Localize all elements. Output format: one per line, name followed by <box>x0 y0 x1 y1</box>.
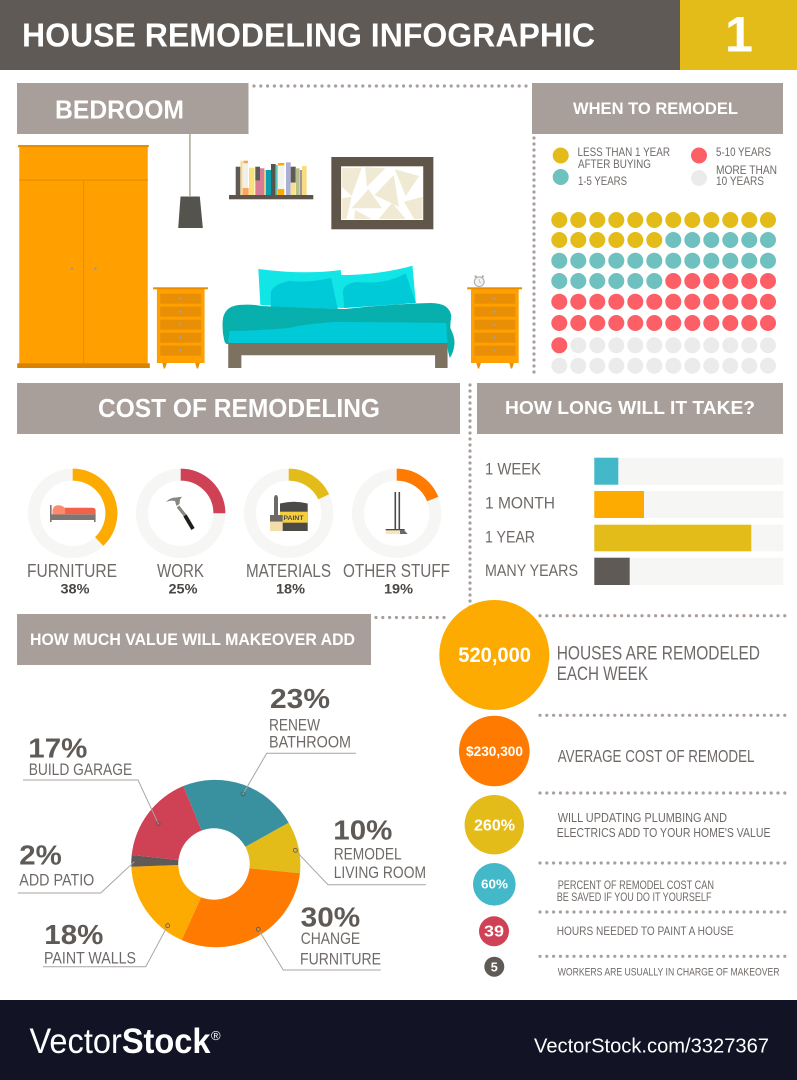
stat: 60% saved <box>473 863 714 906</box>
title: HOUSE REMODELING INFOGRAPHIC <box>22 16 595 54</box>
panel: bedroom <box>17 83 522 368</box>
framed picture <box>331 157 433 229</box>
heading: how much value <box>17 614 371 665</box>
panel: when to remodel <box>532 83 783 374</box>
stat: average cost <box>459 716 755 786</box>
stat: 5 workers: 5 <box>491 960 498 974</box>
footer url: VectorStock.com/3327367 <box>534 1036 769 1058</box>
gauge: work <box>142 475 219 597</box>
callout: change furniture: FURNITURE <box>300 950 381 968</box>
stat: 260% value: WILL UPDATING PLUMBING AND <box>558 811 727 825</box>
heading: cost of remodeling: COST OF REMODELING <box>98 393 380 423</box>
bookshelf <box>229 161 313 199</box>
label: furniture: FURNITURE <box>27 561 117 581</box>
panel: cost of remodeling <box>17 383 460 597</box>
callout: remodel living room: 10% <box>333 814 392 845</box>
legend: LESS THAN 1 YEAR <box>578 145 670 159</box>
value: 18%: 18% <box>276 581 306 597</box>
bar: 1 month: 1 MONTH <box>485 494 555 513</box>
callout: add patio <box>18 839 136 893</box>
heading: bedroom: BEDROOM <box>55 94 184 124</box>
bar: many years <box>485 558 783 585</box>
furniture group <box>17 134 522 368</box>
legend <box>553 145 777 188</box>
stat: 39 hours: 39 <box>484 924 504 940</box>
value: 25%: 25% <box>168 581 198 597</box>
stat: 60% saved: BE SAVED IF YOU DO IT YOURSELF <box>557 892 712 904</box>
label: other stuff: OTHER STUFF <box>343 561 450 581</box>
callout: change furniture <box>256 902 381 970</box>
wardrobe <box>17 145 150 368</box>
bar: 1 year: 1 YEAR <box>485 527 535 546</box>
icon: hammer <box>166 497 193 529</box>
mattress <box>229 320 447 343</box>
donut chart <box>131 780 300 947</box>
page number: 1 <box>725 6 753 62</box>
bed <box>223 266 455 368</box>
dot matrix chart <box>551 212 776 374</box>
callout: remodel living room: LIVING ROOM <box>334 864 426 882</box>
panel: how long will it take <box>477 383 783 585</box>
stat: 39 hours <box>479 916 734 946</box>
callout: remodel living room <box>293 814 426 885</box>
heading: when to remodel <box>532 83 783 134</box>
alarm clock <box>474 275 484 287</box>
value: 38%: 38% <box>60 581 90 597</box>
callout: add patio: 2% <box>19 839 62 870</box>
legend: 10 YEARS <box>716 174 764 188</box>
gauge: other stuff <box>343 475 450 597</box>
stat: average cost: $230,300 <box>466 744 523 759</box>
bar: 1 week <box>485 458 783 485</box>
callout: add patio: ADD PATIO <box>19 872 94 890</box>
callout: build garage: 17% <box>28 732 87 763</box>
legend: AFTER BUYING <box>578 157 651 171</box>
stat: 60% saved: 60% <box>481 877 508 892</box>
stat: 60% saved: PERCENT OF REMODEL COST CAN <box>558 880 714 892</box>
callout: renew bathroom: RENEW <box>269 716 320 734</box>
stat: 520,000 houses: 520,000 <box>458 644 531 667</box>
heading: how long <box>477 383 783 434</box>
bar: 1 week: 1 WEEK <box>485 460 542 479</box>
stat: 39 hours: HOURS NEEDED TO PAINT A HOUSE <box>557 924 734 938</box>
stat: 520,000 houses <box>439 600 760 710</box>
label: materials: MATERIALS <box>246 561 331 581</box>
legend: 1-5 YEARS <box>578 174 627 188</box>
panel: key statistics <box>439 600 780 978</box>
pendant lamp <box>178 134 203 228</box>
gauge: materials <box>246 475 331 597</box>
callout: build garage <box>23 732 160 826</box>
callout: paint walls <box>43 919 170 967</box>
value: 19%: 19% <box>384 581 414 597</box>
callout: build garage: BUILD GARAGE <box>29 761 132 779</box>
bar: 1 year <box>485 525 783 551</box>
panel: how much value <box>17 614 426 970</box>
registered mark: ® <box>211 1028 221 1043</box>
legend: MORE THAN <box>716 163 777 177</box>
bar: many years: MANY YEARS <box>485 561 578 580</box>
callout: paint walls: PAINT WALLS <box>44 949 136 967</box>
heading: bedroom <box>17 83 248 134</box>
callout: change furniture: CHANGE <box>301 930 360 948</box>
callout: renew bathroom: BATHROOM <box>269 733 351 751</box>
callout: remodel living room: REMODEL <box>334 845 402 863</box>
callout: renew bathroom <box>241 683 356 796</box>
stat: 260% value <box>465 795 770 854</box>
pillows <box>258 266 416 309</box>
bed frame <box>228 342 448 368</box>
footer: watermark bar <box>0 1000 797 1080</box>
heading: when to remodel: WHEN TO REMODEL <box>573 99 738 118</box>
callout: change furniture: 30% <box>301 902 360 933</box>
heading: how long: HOW LONG WILL IT TAKE? <box>505 398 755 418</box>
icon: broom <box>386 492 408 534</box>
stat: 520,000 houses: EACH WEEK <box>557 664 648 685</box>
stat: 260% value: 260% <box>474 818 515 835</box>
icon: paint can and brush: PAINT <box>284 516 304 522</box>
left nightstand <box>153 287 208 368</box>
header banner <box>0 0 797 70</box>
blanket <box>223 303 455 358</box>
legend: 5-10 YEARS <box>716 145 771 159</box>
label: work: WORK <box>157 561 204 581</box>
icon: bed <box>50 505 96 522</box>
bar: 1 month <box>485 491 783 518</box>
callout: renew bathroom: 23% <box>270 683 330 714</box>
stat: 5 workers <box>484 957 780 978</box>
heading: cost of remodeling <box>17 383 460 434</box>
heading: how much value: HOW MUCH VALUE WILL MAKEOVER ADD <box>30 631 355 649</box>
callout: paint walls: 18% <box>44 919 103 950</box>
right nightstand <box>467 275 522 368</box>
gauge: furniture <box>27 475 117 597</box>
footer logo: VectorStock <box>30 1022 211 1061</box>
